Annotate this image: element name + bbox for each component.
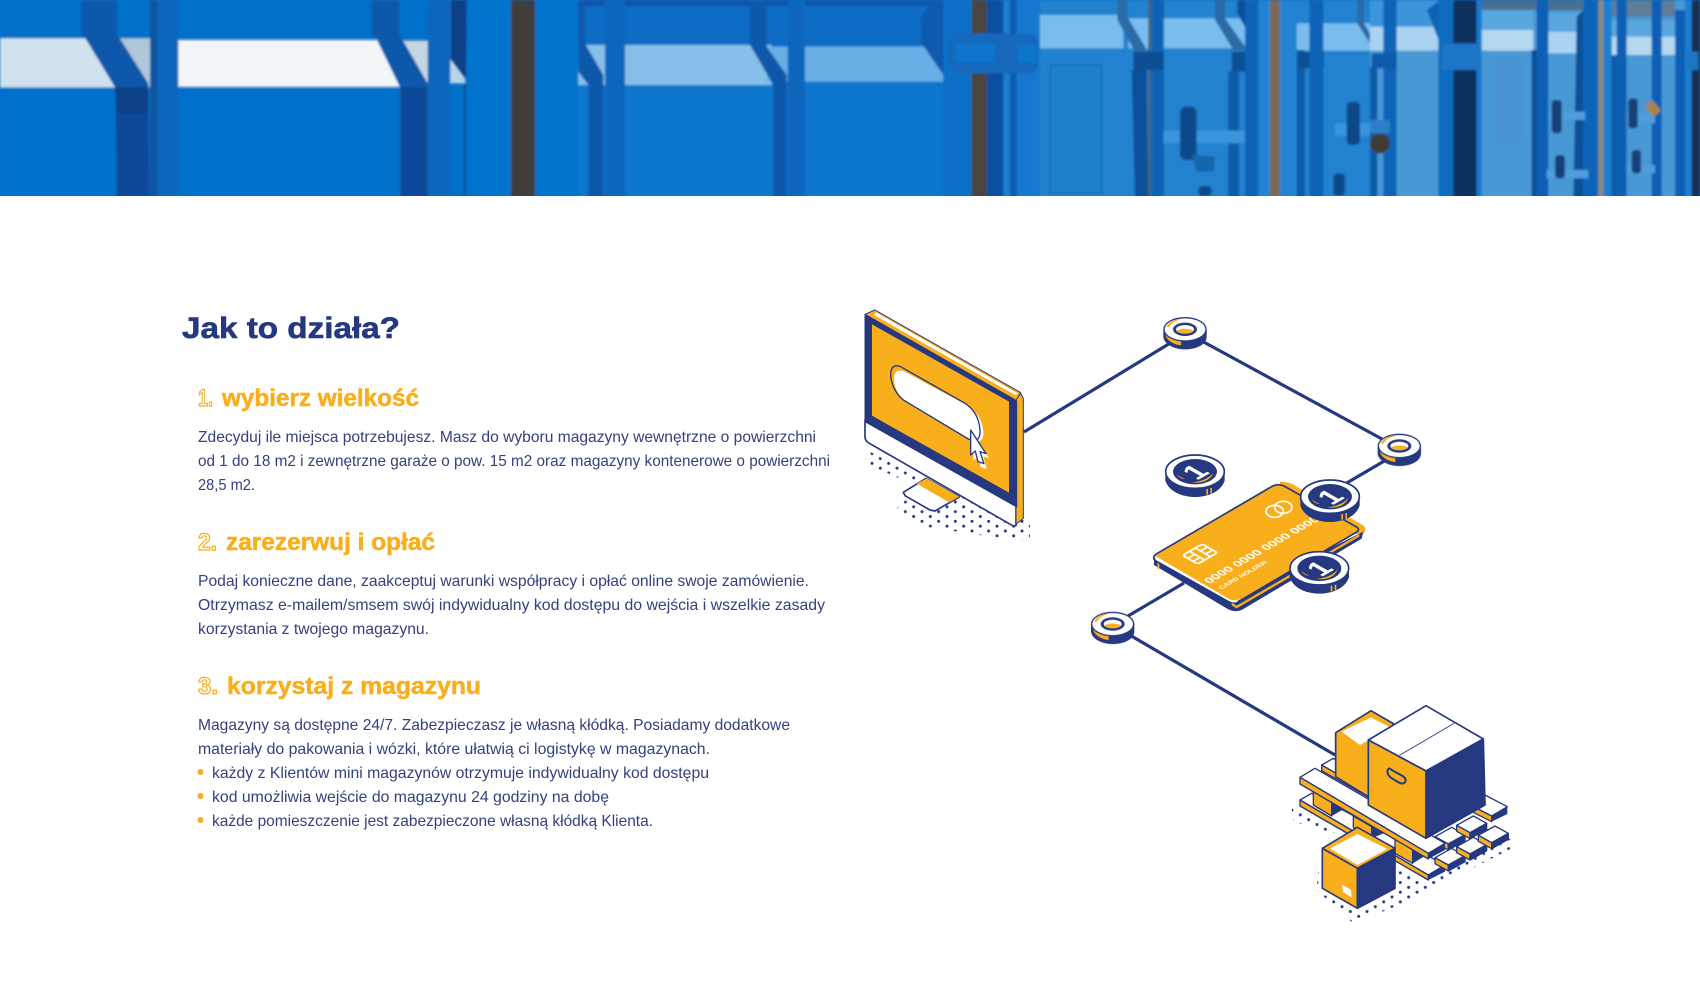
step 3 bullet list <box>198 765 709 830</box>
back box <box>1336 711 1394 797</box>
step 2 text: Podaj konieczne dane, zaakceptuj warunki współpracy i opłać online swoje zamówienie. <box>198 573 809 590</box>
step 1 heading: wybierz wielkość <box>221 385 419 412</box>
card chip <box>1183 544 1217 564</box>
monitor screen <box>872 324 1009 493</box>
network node 3 <box>1091 612 1134 644</box>
connector lines <box>1024 340 1386 755</box>
step 3 bullet list: kod umożliwia wejście do magazynu 24 godziny na dobę <box>212 789 609 806</box>
card holder: CARD HOLDER <box>1217 560 1270 590</box>
step 1 text: Zdecyduj ile miejsca potrzebujesz. Masz do wyboru magazyny wewnętrzne o powierzchni <box>198 429 816 446</box>
credit card <box>1154 482 1365 611</box>
step 2 heading: 2. <box>198 529 217 556</box>
step 3 bullet list: każdy z Klientów mini magazynów otrzymuje indywidualny kod dostępu <box>212 765 709 782</box>
mouse cursor <box>971 430 989 469</box>
step 3 text: materiały do pakowania i wózki, które ułatwią ci logistykę w magazynach. <box>198 741 710 758</box>
monitor top edge <box>865 310 1021 400</box>
step 1 text: od 1 do 18 m2 i zewnętrzne garaże o pow. 15 m2 oraz magazyny kontenerowe o powierzchni <box>198 453 830 470</box>
card and network nodes <box>1091 318 1421 644</box>
icon: computer monitor <box>865 310 1030 540</box>
step 2 heading: zarezerwuj i opłać <box>226 529 435 556</box>
step 1 text: 28,5 m2. <box>198 477 255 494</box>
coin 3 <box>1290 552 1349 594</box>
network node 1 <box>1163 318 1207 349</box>
card number: 0000 0000 0000 0000 <box>1202 515 1323 585</box>
network node 2 <box>1378 434 1421 466</box>
title: Jak to działa? <box>182 312 400 345</box>
coin 2 <box>1300 480 1360 522</box>
small box <box>1322 827 1395 908</box>
coin 3: 1 <box>1300 557 1341 581</box>
step 2 text: korzystania z twojego magazynu. <box>198 621 429 638</box>
step 2 text <box>198 573 825 638</box>
floor dots <box>1292 808 1515 923</box>
monitor stand <box>903 478 959 511</box>
pallet <box>1300 758 1508 880</box>
step 3 bullet list: każde pomieszczenie jest zabezpieczone własną kłódką Klienta. <box>212 813 653 830</box>
monitor right edge <box>1016 393 1023 524</box>
monitor chin <box>865 420 1016 526</box>
step 3 text <box>198 717 790 758</box>
coin 1: 1 <box>1175 460 1217 484</box>
step 2 text: Otrzymasz e-mailem/smsem swój indywidualny kod dostępu do wejścia i wszelkie zasady <box>198 597 825 614</box>
coin 1 <box>1165 455 1225 497</box>
banner photo: blue shipping containers <box>0 0 1700 202</box>
step 3 text: Magazyny są dostępne 24/7. Zabezpieczasz je własną kłódką. Posiadamy dodatkowe <box>198 717 790 734</box>
card logo <box>1266 501 1292 517</box>
left column: how it works text <box>182 312 830 830</box>
icon: pallet with boxes <box>1292 706 1515 923</box>
step 1 text <box>198 429 830 494</box>
step 3 heading: korzystaj z magazynu <box>227 673 481 700</box>
coin 2: 1 <box>1310 485 1352 509</box>
search pill <box>891 366 983 441</box>
monitor bezel <box>865 315 1017 507</box>
monitor floor dots <box>865 449 1030 540</box>
step 1 heading: 1. <box>198 385 213 412</box>
big box <box>1368 706 1485 838</box>
step 3 heading: 3. <box>198 673 218 700</box>
